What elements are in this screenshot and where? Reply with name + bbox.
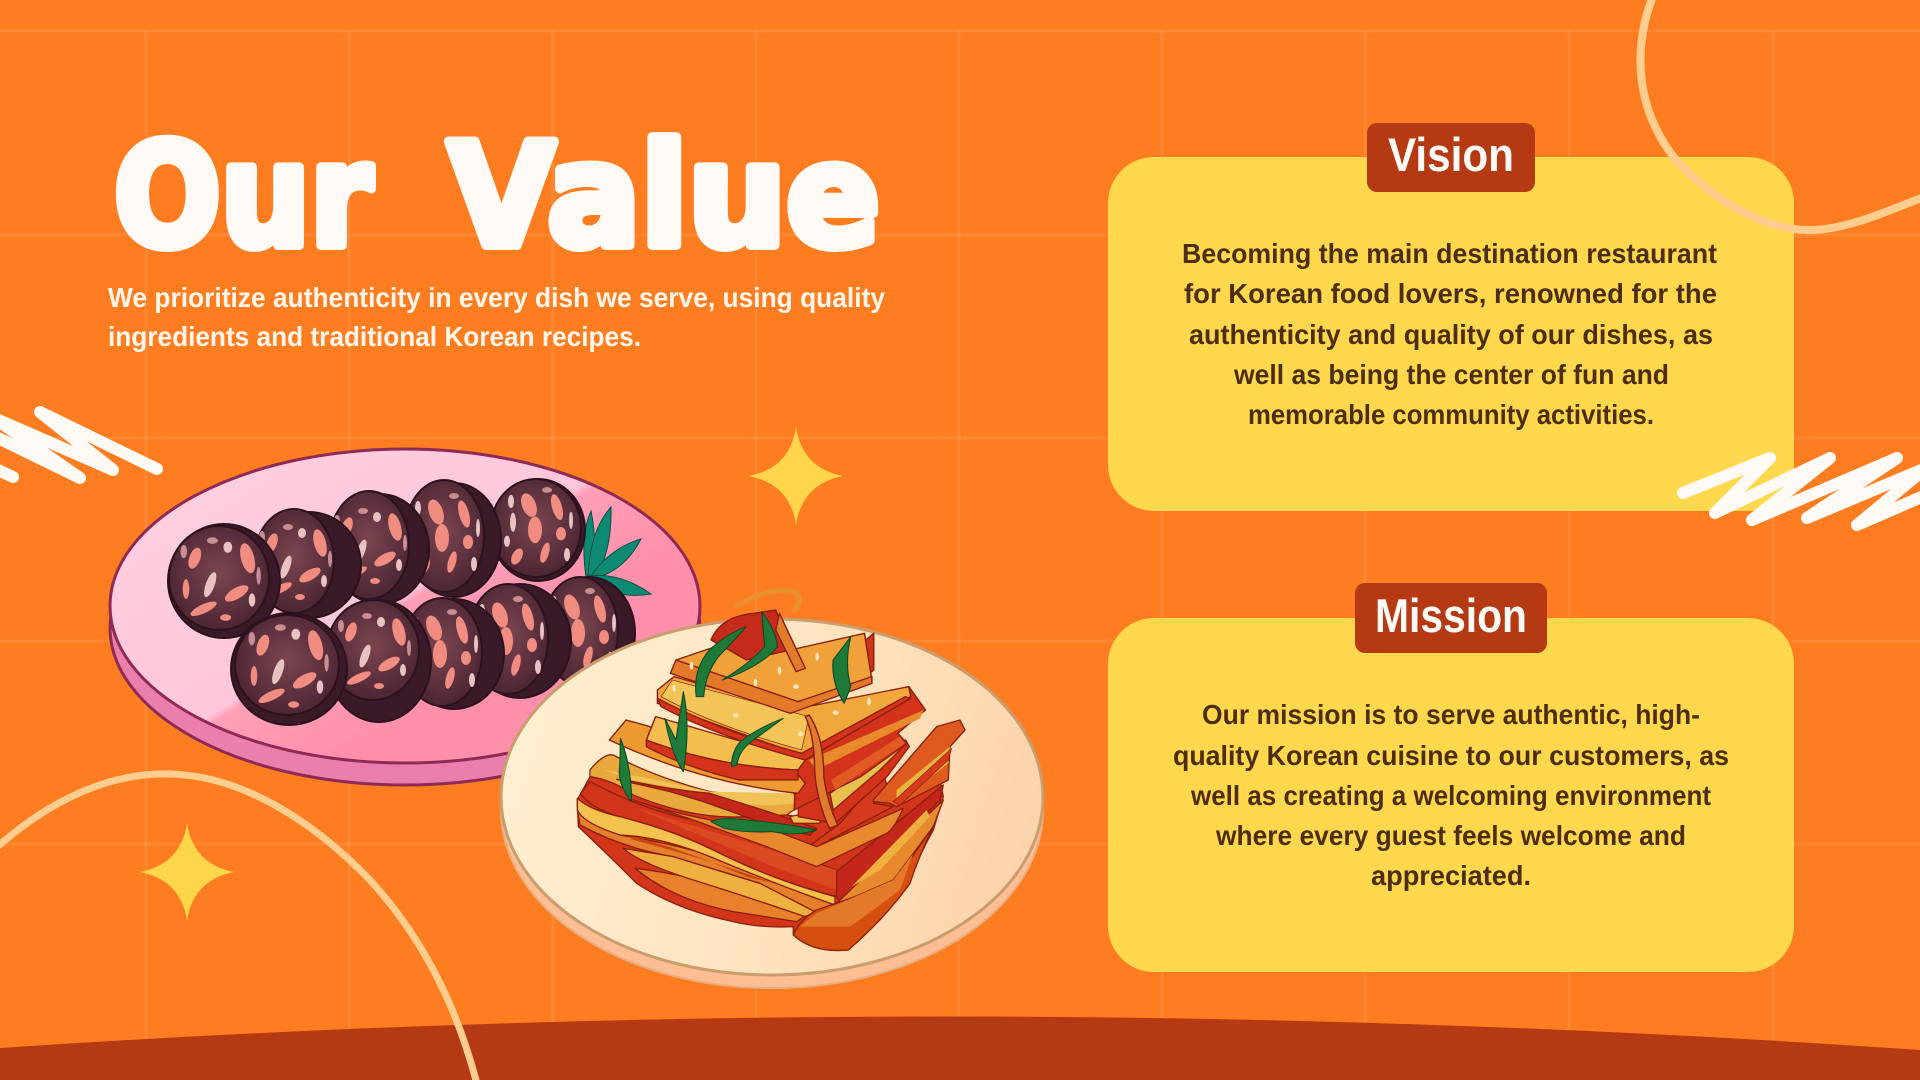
icon: sparkle bottom — [140, 823, 234, 921]
kimchi lower stack — [577, 720, 965, 950]
tab: vision — [1367, 123, 1535, 192]
top right curve — [1640, 0, 1920, 230]
bottom hill — [0, 1016, 1920, 1080]
kimchi upper stack — [609, 591, 925, 834]
plate: cream — [501, 619, 1043, 988]
mission text: where every guest feels welcome and — [1215, 820, 1686, 851]
title — [114, 114, 880, 279]
vision text: well as being the center of fun and — [1233, 359, 1669, 390]
tab: vision: Vision — [1388, 128, 1514, 181]
left curve — [0, 774, 477, 1080]
sausage slices: lower row — [231, 577, 635, 725]
illustration: pink plate with sausage — [110, 449, 700, 785]
scribble: left — [0, 412, 157, 478]
leaves — [584, 507, 651, 595]
tab: mission — [1355, 583, 1547, 653]
plate: pink — [110, 449, 700, 785]
mission text — [1173, 699, 1729, 891]
vision text: Becoming the main destination restaurant — [1182, 238, 1717, 269]
title: Value — [448, 114, 880, 279]
mission text: well as creating a welcoming environment — [1190, 780, 1711, 811]
card: vision — [1108, 157, 1794, 511]
sausage slices: upper row — [168, 479, 585, 638]
subtitle text: ingredients and traditional Korean recipes. — [108, 321, 641, 352]
illustration: cream plate with kimchi — [501, 591, 1043, 988]
subtitle text: We prioritize authenticity in every dish we serve, using quality — [108, 282, 885, 313]
title: Our — [114, 114, 372, 279]
icon: sparkle top — [749, 427, 843, 525]
mission text: appreciated. — [1371, 860, 1531, 891]
scribble: right — [1683, 458, 1920, 525]
mission text: Our mission is to serve authentic, high- — [1202, 699, 1700, 730]
subtitle text — [108, 282, 885, 352]
vision text: authenticity and quality of our dishes, as — [1189, 319, 1713, 350]
tab: mission: Mission — [1375, 589, 1527, 642]
vision text: memorable community activities. — [1248, 399, 1654, 430]
panel: mission — [1108, 583, 1794, 972]
vision text — [1182, 238, 1717, 430]
card: mission — [1108, 618, 1794, 972]
panel: vision — [1108, 123, 1794, 511]
mission text: quality Korean cuisine to our customers, as — [1173, 740, 1729, 771]
vision text: for Korean food lovers, renowned for the — [1184, 278, 1717, 309]
